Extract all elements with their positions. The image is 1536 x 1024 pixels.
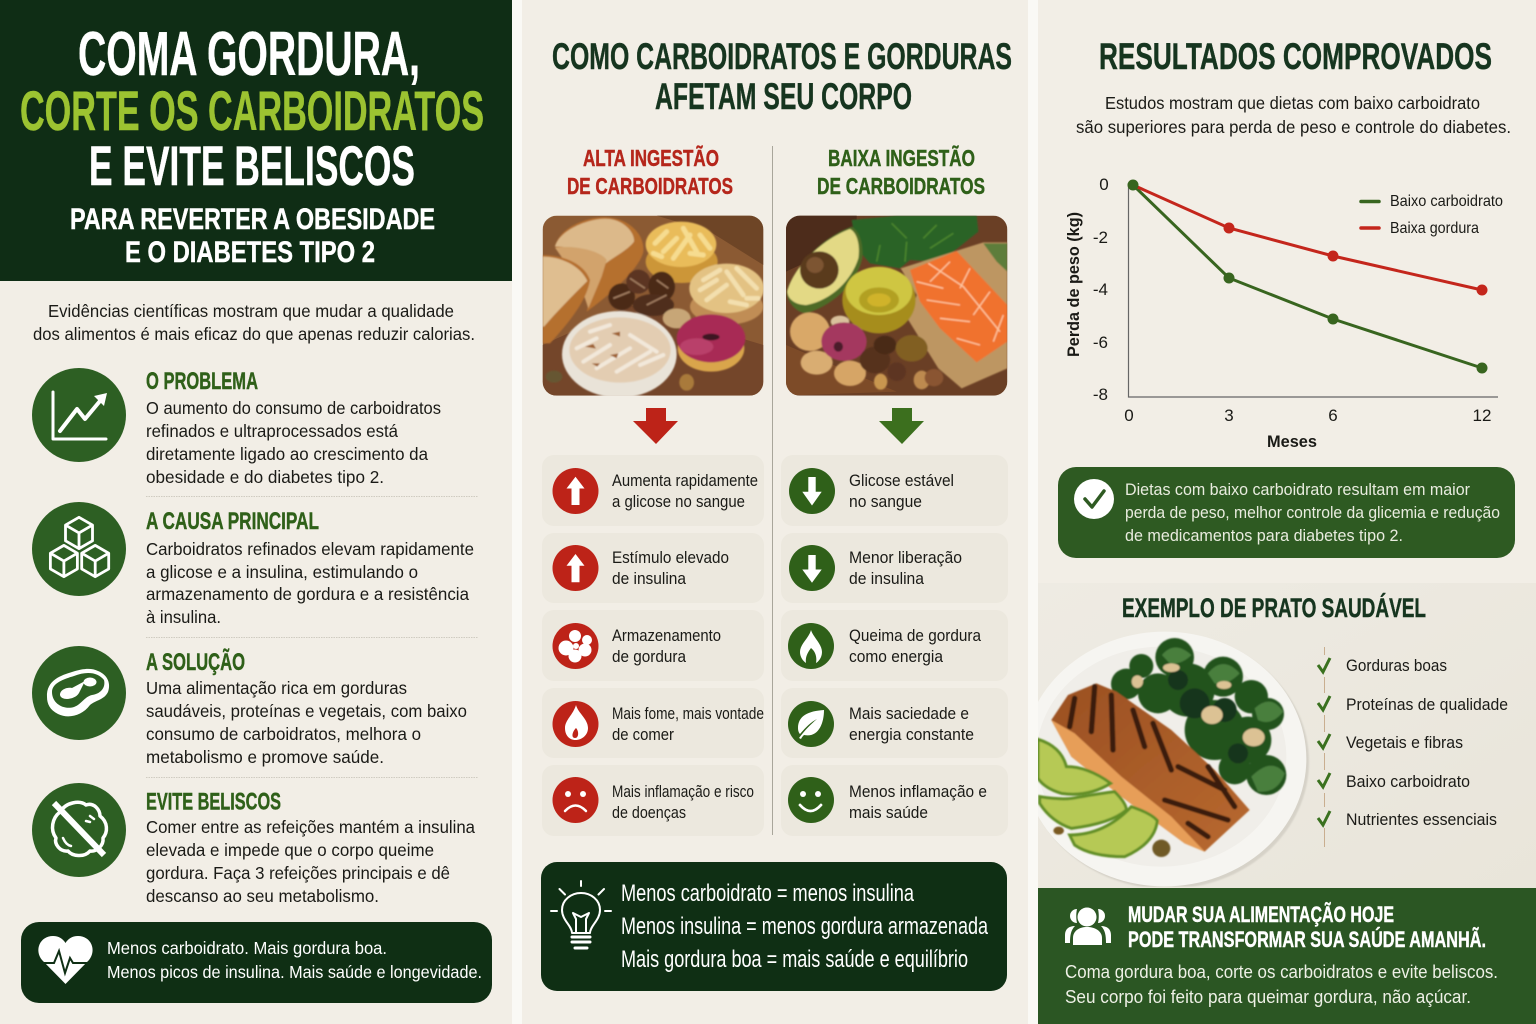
callout: equations: Menos carboidrato = menos insulina — [621, 880, 914, 907]
heading: como carboidratos — [552, 36, 1012, 117]
title header: E EVITE BELISCOS — [89, 134, 415, 197]
body: o problema: O aumento do consumo de carboidratos — [146, 398, 441, 418]
axis labels: Perda de peso (kg) — [1064, 212, 1083, 357]
callout: longevidade — [21, 922, 492, 1003]
callout: result summary — [1058, 467, 1515, 558]
title header: CORTE OS CARBOIDRATOS — [20, 79, 484, 142]
card: glicose estavel: Glicose estável — [849, 472, 954, 490]
heading: como carboidratos: COMO CARBOIDRATOS E GORDURAS — [552, 36, 1012, 77]
axis labels: -6 — [1093, 333, 1108, 352]
axis labels: -8 — [1093, 385, 1108, 404]
photo: high carb foods — [543, 216, 764, 398]
body: a solucao: saudáveis, proteínas e vegetais, com baixo — [146, 701, 467, 721]
card: aumenta glicose — [542, 455, 764, 526]
legend: Baixa gordura — [1390, 220, 1479, 237]
axis labels: 0 — [1099, 175, 1109, 194]
callout: equations: Mais gordura boa = mais saúde e equilíbrio — [621, 946, 968, 973]
heading: baixa ingestao — [817, 144, 985, 199]
intro text — [33, 301, 475, 344]
icon: light bulb — [551, 881, 611, 948]
card: estimulo insulina: Estímulo elevado — [612, 549, 729, 567]
card: armazenamento — [542, 610, 764, 681]
callout: result summary: Dietas com baixo carboidrato resultam em maior — [1125, 481, 1470, 499]
panel: call to action: Seu corpo foi feito para queimar gordura, não açúcar. — [1065, 987, 1471, 1007]
icon: people group — [1065, 908, 1111, 945]
card: menos inflamacao: Menos inflamação e — [849, 783, 987, 801]
body: a solucao: consumo de carboidratos, melhora o — [146, 724, 421, 744]
card: menor insulina: Menor liberação — [849, 549, 962, 567]
card: saciedade: Mais saciedade e — [849, 705, 969, 723]
heading: como carboidratos: AFETAM SEU CORPO — [655, 76, 912, 117]
panel: healthy plate — [1023, 583, 1536, 889]
line chart: weight loss — [1064, 175, 1503, 451]
card: glicose estavel — [781, 455, 1008, 526]
arrow: green down — [879, 408, 924, 444]
icon: heart with pulse — [38, 936, 93, 984]
heading: alta ingestao: ALTA INGESTÃO — [583, 144, 719, 171]
card: mais fome — [542, 688, 764, 758]
intro: estudos — [1076, 93, 1511, 137]
title header — [0, 0, 512, 281]
card: estimulo insulina: de insulina — [612, 570, 687, 588]
card: armazenamento: de gordura — [612, 648, 687, 666]
card: armazenamento: Armazenamento — [612, 627, 721, 645]
card: saciedade: energia constante — [849, 726, 974, 744]
heading: alta ingestao — [567, 144, 733, 199]
checklist: Baixo carboidrato — [1346, 773, 1470, 791]
axis labels: 6 — [1328, 406, 1338, 425]
low carb effect list — [781, 455, 1008, 836]
body: evite beliscos: descanso ao seu metabolismo. — [146, 886, 379, 906]
body: a causa principal: Carboidratos refinados elevam rapidamente — [146, 539, 474, 559]
card: queima de gordura: Queima de gordura — [849, 627, 982, 645]
body: a causa principal — [146, 539, 474, 627]
right column — [1023, 0, 1536, 1024]
heading: baixa ingestao: DE CARBOIDRATOS — [817, 173, 985, 199]
intro: estudos: são superiores para perda de peso e controle do diabetes. — [1076, 117, 1511, 137]
card: menos inflamacao — [781, 765, 1008, 836]
body: o problema: refinados e ultraprocessados está — [146, 421, 398, 441]
card: queima de gordura: como energia — [849, 648, 944, 666]
card: mais fome: Mais fome, mais vontade — [612, 705, 764, 723]
callout: longevidade: Menos picos de insulina. Mais saúde e longevidade. — [107, 962, 482, 982]
checklist — [1318, 647, 1508, 847]
card: glicose estavel: no sangue — [849, 493, 922, 511]
axis labels: -4 — [1093, 280, 1108, 299]
axis labels: Meses — [1267, 432, 1317, 451]
axis labels: 3 — [1224, 406, 1234, 425]
card: saciedade — [781, 688, 1008, 758]
high carb effect list — [542, 455, 764, 836]
callout: equations — [541, 862, 1007, 991]
card: inflamacao — [542, 765, 764, 836]
heading: a causa principal: A CAUSA PRINCIPAL — [146, 508, 319, 535]
body: o problema — [146, 398, 441, 487]
icon: rising chart — [32, 368, 126, 462]
axis labels: 0 — [1124, 406, 1134, 425]
axis labels: 12 — [1473, 406, 1491, 425]
body: evite beliscos: elevada e impede que o corpo queime — [146, 840, 434, 860]
panel: call to action: Coma gordura boa, corte os carboidratos e evite beliscos. — [1065, 962, 1498, 982]
card: mais fome: de comer — [612, 726, 674, 744]
icon: sugar cubes — [32, 502, 126, 596]
callout: result summary: perda de peso, melhor controle da glicemia e redução — [1125, 504, 1500, 522]
checklist: Proteínas de qualidade — [1346, 696, 1508, 714]
heading: baixa ingestao: BAIXA INGESTÃO — [828, 144, 975, 171]
left column — [0, 0, 512, 1024]
card: menor insulina — [781, 533, 1008, 603]
arrow: red down — [633, 408, 678, 444]
section: a causa principal — [32, 502, 474, 627]
panel: call to action: MUDAR SUA ALIMENTAÇÃO HOJE — [1128, 902, 1394, 927]
body: evite beliscos — [146, 817, 475, 906]
body: a causa principal: à insulina. — [146, 607, 221, 627]
body: o problema: diretamente ligado ao crescimento da — [146, 444, 428, 464]
legend: Baixo carboidrato — [1390, 193, 1503, 210]
card: inflamacao: de doenças — [612, 804, 686, 822]
intro: estudos: Estudos mostram que dietas com baixo carboidrato — [1105, 93, 1480, 113]
intro text: Evidências científicas mostram que mudar a qualidade — [48, 301, 454, 321]
body: a solucao: metabolismo e promove saúde. — [146, 747, 384, 767]
photo: salmon plate — [1023, 632, 1309, 889]
heading: a solucao: A SOLUÇÃO — [146, 648, 245, 676]
legend — [1361, 193, 1503, 237]
panel: call to action — [1038, 888, 1536, 1024]
icon: crossed-out snack — [32, 783, 126, 877]
card: aumenta glicose: Aumenta rapidamente — [612, 472, 758, 490]
heading: alta ingestao: DE CARBOIDRATOS — [567, 173, 733, 199]
middle column — [522, 0, 1028, 1024]
checklist: Vegetais e fibras — [1346, 734, 1463, 752]
icon: check circle — [1074, 479, 1114, 519]
intro text: dos alimentos é mais eficaz do que apenas reduzir calorias. — [33, 324, 475, 344]
body: a causa principal: a glicose e a insulina, estimulando o — [146, 562, 418, 582]
title header: PARA REVERTER A OBESIDADE — [70, 203, 435, 236]
photo: low carb foods — [786, 216, 1007, 396]
body: a solucao: Uma alimentação rica em gorduras — [146, 678, 407, 698]
callout: result summary: de medicamentos para diabetes tipo 2. — [1125, 527, 1403, 545]
checklist: Nutrientes essenciais — [1346, 811, 1497, 829]
card: aumenta glicose: a glicose no sangue — [612, 493, 745, 511]
section: a solucao — [32, 646, 467, 767]
callout: longevidade: Menos carboidrato. Mais gordura boa. — [107, 938, 387, 958]
axis labels: -2 — [1093, 228, 1108, 247]
heading: o problema: O PROBLEMA — [146, 368, 258, 395]
card: menor insulina: de insulina — [849, 570, 925, 588]
card: inflamacao: Mais inflamação e risco — [612, 783, 754, 801]
section: evite beliscos — [32, 783, 475, 906]
icon: steak — [32, 646, 126, 740]
card: menos inflamacao: mais saúde — [849, 804, 928, 822]
checklist: Gorduras boas — [1346, 657, 1447, 675]
body: evite beliscos: gordura. Faça 3 refeições principais e dê — [146, 863, 450, 883]
body: a causa principal: armazenamento de gordura e a resistência — [146, 584, 469, 604]
heading: evite beliscos: EVITE BELISCOS — [146, 788, 281, 816]
card: estimulo insulina — [542, 533, 764, 603]
section: o problema — [32, 368, 441, 487]
title header: COMA GORDURA, — [78, 20, 420, 89]
card: queima de gordura — [781, 610, 1008, 681]
title header: E O DIABETES TIPO 2 — [125, 236, 375, 269]
axis labels — [1064, 175, 1491, 451]
body: evite beliscos: Comer entre as refeições mantém a insulina — [146, 817, 475, 837]
body: a solucao — [146, 678, 467, 767]
callout: equations: Menos insulina = menos gordura armazenada — [621, 913, 988, 940]
body: o problema: obesidade e do diabetes tipo 2. — [146, 467, 384, 487]
